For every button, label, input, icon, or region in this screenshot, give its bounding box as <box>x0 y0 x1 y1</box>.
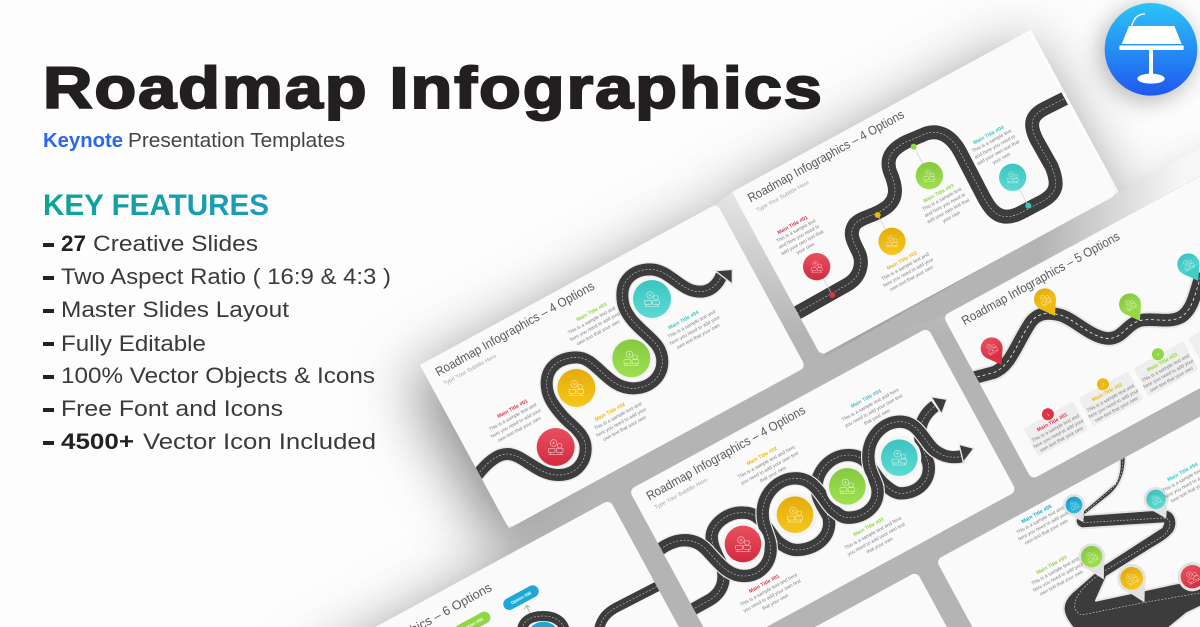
feature 6: Free Font and Icons <box>61 396 283 421</box>
card 1: Main Title #01 <box>1036 412 1069 433</box>
pin 3 green <box>1074 539 1116 586</box>
step 2 text: This is a sample text and <box>880 251 931 282</box>
step 3 text <box>1026 549 1088 599</box>
slide panel: 6 options <box>311 500 699 627</box>
card 1: 1 <box>1046 412 1050 417</box>
step 3 text <box>922 184 970 224</box>
icon: keynote app <box>1105 3 1197 96</box>
slide panel: bottom centre blank <box>618 572 1006 627</box>
main title: Roadmap Infographics <box>43 57 822 121</box>
card 1: This is a sample text and <box>1031 413 1081 444</box>
step 3 text: here you need to add your <box>569 311 622 343</box>
road <box>793 95 1072 315</box>
step 1 text: This is a sample text and here <box>739 572 799 608</box>
step 1 text: and here you need to <box>778 223 821 251</box>
step 4 text: Main Title #04 <box>973 125 1005 146</box>
pin 3 green <box>1115 289 1149 327</box>
step 1 red circle <box>536 428 575 468</box>
step 3 circle <box>826 468 869 507</box>
step 2 text: that your own <box>759 465 788 484</box>
step 4 text: add your own text that <box>976 139 1021 167</box>
step 3 green circle <box>612 339 650 378</box>
step 3 text: Main Title #03 <box>576 302 608 323</box>
step 5 text: own text that your own <box>1024 518 1069 546</box>
slide panel: 4 options winding road with arrow <box>420 204 806 528</box>
card 3: own text that your own <box>1149 365 1195 394</box>
slide subtitle: Type Your Subtitle Here <box>443 353 498 387</box>
step 5 text: Main Title #05 <box>1021 504 1053 525</box>
step 4 text: you need to add your own text <box>844 393 904 429</box>
step 4 circle <box>880 439 922 476</box>
step 1 text <box>488 399 541 442</box>
card 1: own text that your own <box>1039 425 1085 454</box>
step 3 text: Main Title #03 <box>1036 555 1068 576</box>
card 3 <box>1130 335 1199 396</box>
card 2: 2 <box>1101 382 1105 387</box>
step 2 text: This is a sample text and <box>593 401 643 432</box>
blue circle <box>527 622 560 627</box>
step 2 text: Main Title #02 <box>746 446 779 467</box>
perspective road <box>1064 453 1200 627</box>
slide panel: 4 options interwoven roads <box>629 328 1017 627</box>
card 3: This is a sample text and <box>1141 353 1191 384</box>
step 2 text: Main Title #02 <box>594 402 627 423</box>
feature list <box>43 231 391 454</box>
feature 5: 100% Vector Objects & Icons <box>61 363 375 388</box>
step 3 text: here you need to add your <box>1032 561 1085 594</box>
lower strand road <box>692 397 947 610</box>
step 4 pin <box>999 164 1031 209</box>
card 4 <box>1188 311 1200 366</box>
option 06 pill <box>501 583 541 612</box>
step 3 text: you need to add your own text <box>847 521 907 558</box>
step 4 teal circle <box>633 280 671 318</box>
step 1 text: own text that your own <box>497 415 542 444</box>
key features heading: KEY FEATURES <box>43 189 269 222</box>
pin 2 yellow <box>1030 284 1064 322</box>
right road <box>598 585 660 627</box>
slide subtitle: Type Your Subtitle Here <box>654 477 709 511</box>
step 2 yellow circle <box>556 369 596 407</box>
step 1 text: This is a sample text <box>775 218 817 244</box>
slide title: Roadmap Infographics – 4 Options <box>644 403 808 503</box>
slide title: Roadmap Infographics – 4 Options <box>433 279 597 379</box>
feature 2: Two Aspect Ratio ( 16:9 & 4:3 ) <box>61 264 391 289</box>
road <box>972 273 1200 378</box>
step 4 text <box>972 125 1020 166</box>
winding road <box>477 269 732 475</box>
subtitle: Presentation Templates <box>128 130 345 152</box>
feature 1: 27 <box>61 231 86 256</box>
card 3: Main Title #03 <box>1146 352 1179 373</box>
step 4 text: here you need to add your <box>669 314 722 347</box>
card 3: 3 <box>1156 352 1160 357</box>
feature 7: 4500+ <box>61 429 134 454</box>
step 4 text: Main Title #04 <box>668 310 700 331</box>
subtitle <box>43 130 345 152</box>
step 1 circle <box>722 526 765 562</box>
pin 5 blue <box>1059 490 1093 527</box>
step 1 pin <box>803 253 835 298</box>
card 2: Main Title #02 <box>1091 382 1124 403</box>
card 2: own text that your own <box>1094 395 1140 424</box>
step 3 text: This is a sample text <box>921 186 963 213</box>
slide title: Roadmap Infographics – 4 Options <box>745 107 907 205</box>
step 3 text: and here you need to <box>924 192 967 219</box>
step 2 text: you need to add your own text <box>740 450 800 487</box>
step 4 text: that your own <box>863 408 892 427</box>
pin 1 red <box>977 333 1011 371</box>
step 3 text: Main Title #03 <box>923 183 955 204</box>
step 1 text <box>776 216 824 256</box>
slide panel: 5 options road with map pins <box>943 154 1200 479</box>
card 2 <box>1075 365 1144 426</box>
step 1 text: This is a sample text and <box>488 402 538 433</box>
step 4 text: your own <box>992 151 1012 166</box>
slide title: Roadmap Infographics – 5 Options <box>959 229 1122 328</box>
arched road <box>522 616 565 627</box>
upper strand road <box>660 422 974 576</box>
card 2: This is a sample text and <box>1086 383 1136 414</box>
step 1 text: here you need to add your <box>490 407 543 440</box>
step 3 text: Main Title #03 <box>853 517 885 538</box>
option pill green <box>453 610 493 627</box>
step 4 text: Main Title #04 <box>850 388 883 410</box>
card 3: here you need to add your <box>1143 358 1195 390</box>
feature 3: Master Slides Layout <box>61 297 289 322</box>
feature 1: Creative Slides <box>93 231 258 256</box>
step 2 text: This is a sample text and here <box>737 444 797 480</box>
step 2 pin <box>875 212 906 255</box>
step 2 text: here you need to add your <box>595 406 648 439</box>
pin 1 red <box>1172 557 1200 597</box>
step 2 text: Main Title #02 <box>886 250 919 272</box>
step 3 pin <box>911 144 943 189</box>
step 3 text: own text that your own <box>1039 569 1084 597</box>
feature 7 <box>43 429 376 454</box>
card 2: here you need to add your <box>1088 388 1140 420</box>
feature 7: Vector Icon Included <box>143 429 376 454</box>
step 2 text: own text that your own <box>602 415 648 443</box>
step 3 text: own text that your own <box>576 319 621 347</box>
step 3 text: add your own text that <box>926 197 971 225</box>
step 4 text <box>1157 456 1200 506</box>
slide subtitle: Type Your Subtitle Here <box>755 180 811 214</box>
step 4 text: This is a sample text and <box>667 309 717 340</box>
step 3 text: This is a sample text and <box>1030 556 1080 587</box>
step 4 text: This is a sample text <box>971 128 1013 154</box>
step 1 text: Main Title #01 <box>497 398 529 420</box>
slide panel: perspective road with ringed pins <box>936 398 1200 627</box>
step 3 text <box>568 302 620 346</box>
option 06 pill: Option #06 <box>510 590 533 605</box>
slide panel: 4 options road with pins <box>732 31 1117 355</box>
step 1 text: that your own <box>761 593 790 612</box>
step 5 text <box>1011 498 1073 548</box>
pin 2 yellow <box>1112 559 1157 609</box>
step 2 text: here you need to add your <box>882 257 935 289</box>
step 5 text: This is a sample text and <box>1015 505 1065 536</box>
small arrow <box>524 605 530 613</box>
step 1 text: your own <box>796 241 816 256</box>
step 4 text: own text that your own <box>676 323 721 351</box>
step 4 text: This is a sample text and here <box>841 387 901 423</box>
pin 4 teal <box>1173 249 1200 287</box>
step 3 text: This is a sample text and here <box>843 515 903 551</box>
step 3 text: that your own <box>866 536 894 555</box>
step 3 text: your own <box>942 210 962 225</box>
subtitle: Keynote <box>43 130 123 152</box>
feature 1 <box>43 231 258 256</box>
feature 4: Fully Editable <box>61 331 206 356</box>
pin 4 teal <box>1139 483 1177 524</box>
step 1 text: you need to add your own text <box>742 578 803 614</box>
card 1 <box>1020 395 1089 456</box>
step 1 text: Main Title #01 <box>748 573 781 595</box>
grey gaps between slides <box>505 148 1200 627</box>
step 5 text: here you need to add your <box>1017 510 1070 543</box>
step 1 text: Main Title #01 <box>777 215 809 236</box>
step 2 circle <box>776 496 816 533</box>
step 1 text: add your own text that <box>780 229 825 257</box>
card 1: here you need to add your <box>1033 418 1085 450</box>
step 2 text: own text that your own <box>889 264 935 293</box>
step 3 text: This is a sample text and <box>567 305 617 336</box>
step 4 text: Main Title #04 <box>1167 462 1199 483</box>
step 4 text: and here you need to <box>974 133 1017 161</box>
